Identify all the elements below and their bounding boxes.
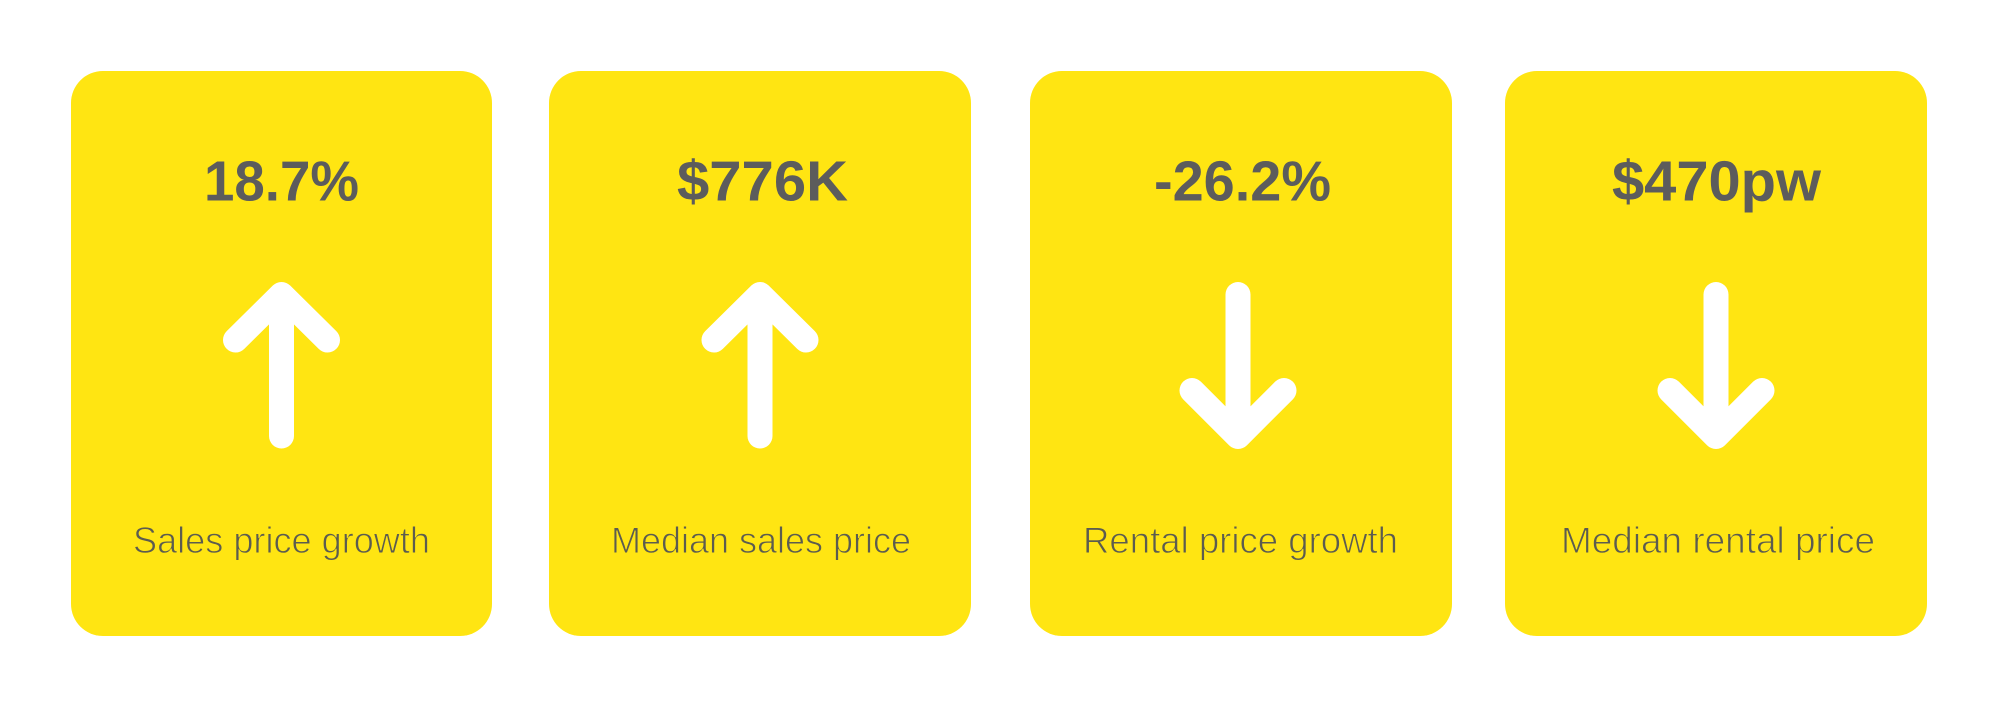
icon: down arrow	[1192, 294, 1284, 436]
label: sales price growth: Sales price growth	[133, 520, 430, 561]
panel: sales price growth	[71, 71, 492, 636]
value: $776K: $776K	[677, 150, 848, 214]
panel: median rental price	[1505, 71, 1927, 636]
panel: rental price growth	[1030, 71, 1452, 636]
icon: up arrow	[714, 294, 806, 436]
label: rental price growth: Rental price growth	[1083, 520, 1398, 561]
icon: down arrow	[1670, 294, 1762, 436]
label: median sales price: Median sales price	[611, 520, 911, 561]
panel: median sales price	[549, 71, 971, 636]
value: 18.7%: 18.7%	[204, 150, 359, 214]
value: $470pw: $470pw	[1612, 150, 1822, 214]
icon: up arrow	[236, 294, 328, 436]
value: -26.2%: -26.2%	[1154, 150, 1331, 214]
label: median rental price: Median rental price	[1561, 520, 1875, 561]
